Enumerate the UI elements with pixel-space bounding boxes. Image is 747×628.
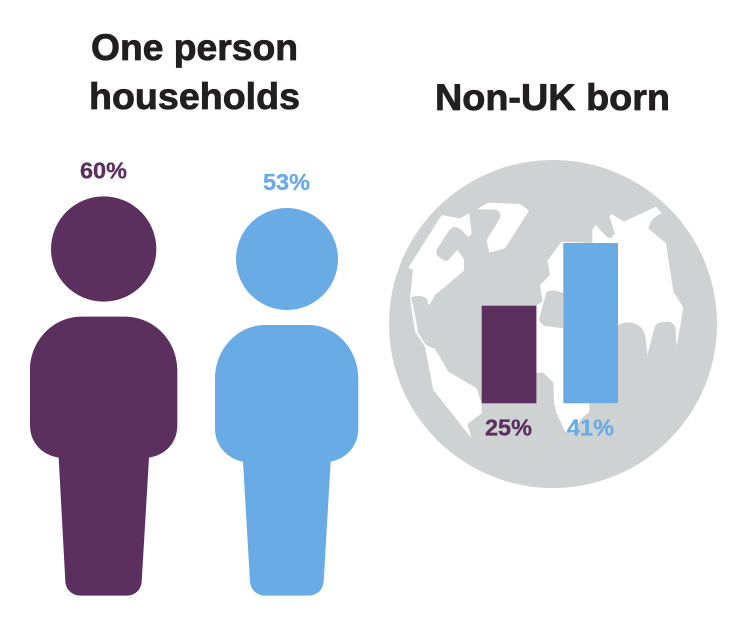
label: 25%: 25% [485,415,532,441]
bar: blue 41% [563,243,618,403]
heading: one person households: households [89,76,300,117]
label: 53%: 53% [263,169,310,195]
icon: blue person [215,208,358,596]
label: 60%: 60% [80,158,127,184]
bar: purple 25% [482,306,536,403]
icon: purple person [30,196,177,596]
label: 41%: 41% [567,415,614,441]
heading: one person households [89,27,300,117]
heading: one person households: One person [91,27,298,68]
icon: globe [389,160,717,488]
heading: non-UK born: Non-UK born [435,77,670,118]
